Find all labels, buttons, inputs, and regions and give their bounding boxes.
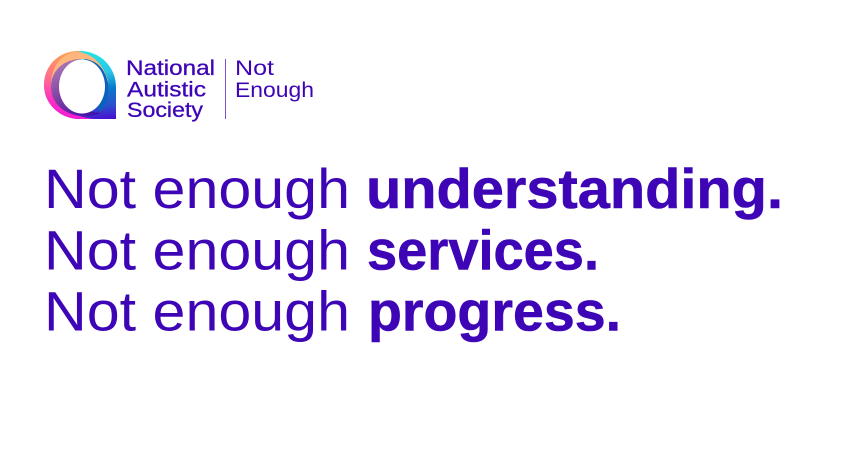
logo wordmark: National Autistic Society: Society bbox=[127, 99, 204, 122]
logo tagline: Not Enough: Enough bbox=[235, 79, 314, 102]
headline line 1: Not enough bbox=[44, 157, 350, 220]
headline line 1 bbox=[44, 157, 783, 220]
logo wordmark: National Autistic Society bbox=[126, 57, 215, 122]
logo divider bbox=[225, 59, 226, 119]
headline line 3: Not enough bbox=[44, 280, 350, 342]
logo: National Autistic Society mark bbox=[44, 51, 116, 119]
logo wordmark: National Autistic Society: National bbox=[126, 57, 215, 80]
headline line 2: Not enough bbox=[44, 218, 350, 282]
headline line 2 bbox=[44, 218, 599, 282]
headline line 3 bbox=[44, 280, 621, 342]
headline line 3: progress. bbox=[368, 280, 621, 342]
logo wordmark: National Autistic Society: Autistic bbox=[127, 78, 206, 102]
logo tagline: Not Enough: Not bbox=[235, 57, 274, 80]
headline line 1: understanding. bbox=[366, 157, 783, 220]
logo tagline: Not Enough bbox=[235, 57, 314, 102]
headline line 2: services. bbox=[367, 218, 599, 282]
